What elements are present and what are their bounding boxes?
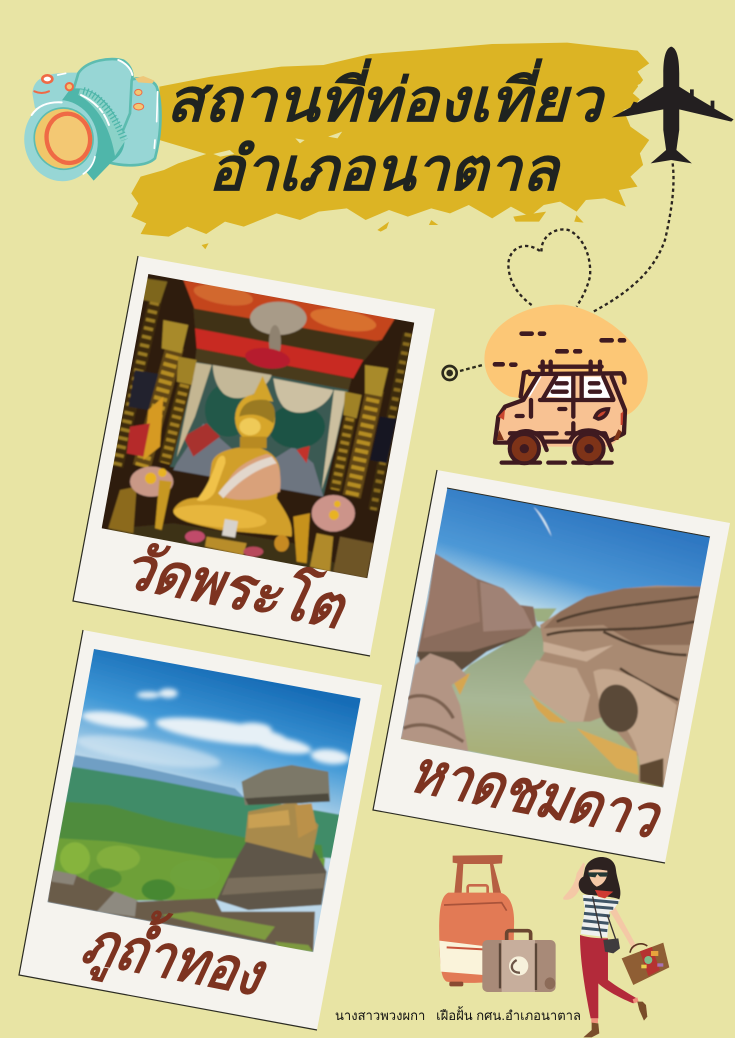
icon: camera [18, 59, 160, 187]
flowers [130, 467, 173, 497]
icon: orange suitcase [439, 855, 514, 986]
polaroid: Hat Chom Dao [373, 470, 730, 863]
title: สถานที่ท่องเที่ยว [163, 58, 619, 134]
title [163, 58, 619, 203]
photo: mushroom rock above forest [42, 642, 368, 958]
icon: airplane [612, 47, 734, 163]
label: Hat Chom Dao: หาดชมดาว [401, 739, 676, 850]
polaroid: Wat Phra To [73, 256, 435, 656]
polaroid: Phu Tham Thong [19, 630, 382, 1030]
title: อำเภอนาตาล [205, 136, 572, 203]
icon: brown travel case [482, 931, 556, 992]
icon: off-road car on orange blob [484, 305, 648, 463]
altar [108, 523, 334, 572]
photo: canyon river under blue sky [397, 482, 717, 792]
icon: location marker with dotted route [443, 365, 483, 380]
columns [117, 293, 408, 510]
dotted flight path with heart [508, 163, 674, 312]
chandelier [250, 302, 307, 335]
photo: golden Buddha in temple [102, 274, 414, 578]
illustration: woman traveller [563, 857, 669, 1037]
credit text: นางสาวพวงผกา เฝือฝั้น กศน.อำเภอนาตาล [335, 1006, 581, 1023]
Buddha [173, 447, 292, 537]
title brush stroke [131, 43, 649, 249]
label: Phu Tham Thong: ภูถ้ำทอง [73, 900, 285, 1011]
label: Wat Phra To: วัดพระโต [114, 534, 362, 640]
